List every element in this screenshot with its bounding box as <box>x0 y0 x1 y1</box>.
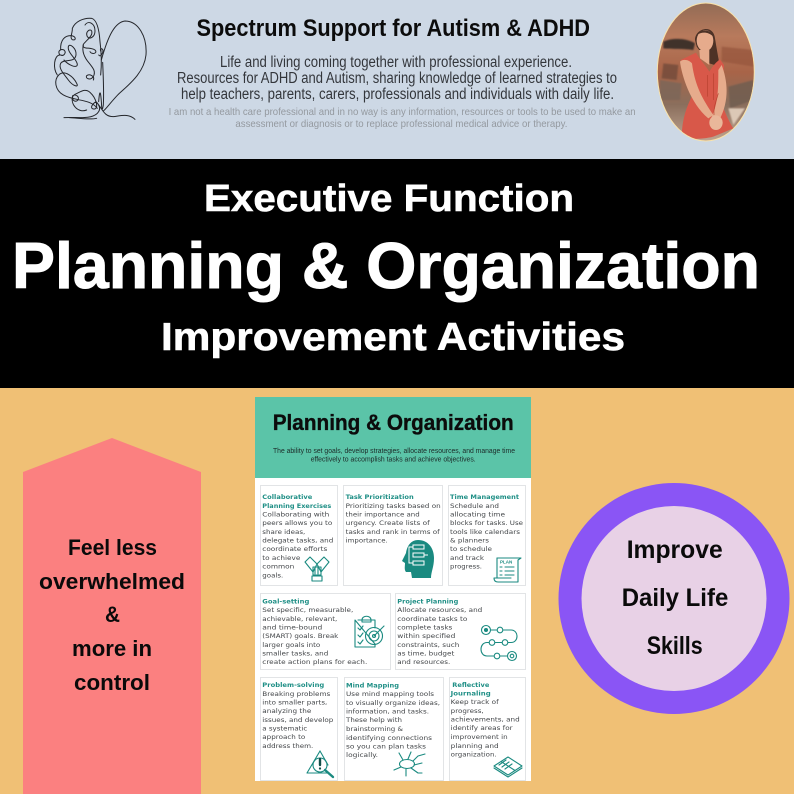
card: problem-solving: Breaking problems <box>262 690 331 698</box>
card: collaborative planning exercises: delegate tasks, and <box>262 536 333 544</box>
icon: plan scroll: PLAN <box>500 560 512 564</box>
card: project planning <box>396 594 526 670</box>
title line: Improvement Activities: Improvement Activities <box>161 316 625 359</box>
card: task prioritization: their importance and <box>346 510 420 518</box>
card: problem-solving: analyzing the <box>262 707 311 715</box>
card: mind mapping: logically. <box>346 751 378 759</box>
card: project planning: Project Planning <box>397 598 459 606</box>
icon: clipboard with target <box>355 616 384 647</box>
icon: joined hands <box>305 557 329 581</box>
main title: Planning & Organization: Planning & Organization <box>12 229 760 302</box>
arrow callout: feel less overwhelmed: more in <box>72 636 152 661</box>
circle callout: improve daily life skills: Skills <box>647 632 703 660</box>
card: goal-setting: smaller tasks, and <box>262 650 328 658</box>
card: project planning: complete tasks <box>397 624 453 632</box>
circle callout: improve daily life skills: Daily Life <box>622 584 728 612</box>
card: task prioritization: tasks and rank in terms of <box>346 528 440 536</box>
card: collaborative planning exercises: Collaborative <box>262 493 313 501</box>
card: goal-setting: larger goals into <box>262 641 320 649</box>
author portrait <box>656 2 755 142</box>
icon: brain and heart line logo <box>55 18 146 119</box>
card: project planning: within specified <box>397 632 455 640</box>
arrow callout: feel less overwhelmed: control <box>74 670 150 695</box>
card: reflective journaling: planning and <box>451 742 499 750</box>
card: mind mapping: so you can plan tasks <box>346 742 427 750</box>
card: time management: & planners <box>450 536 490 544</box>
card: mind mapping: to visually organize ideas, <box>346 699 440 707</box>
disclaimer: I am not a health care professional and in no way is any information, resources or tools to be used to make an <box>169 106 636 118</box>
card: collaborative planning exercises: coordinate efforts <box>262 545 328 553</box>
card: problem-solving: into smaller parts, <box>262 698 327 706</box>
card: reflective journaling: achievements, and <box>451 716 520 724</box>
brand description <box>177 54 617 103</box>
card: collaborative planning exercises: peers allows you to <box>262 519 332 527</box>
circle callout: improve daily life skills <box>558 483 790 714</box>
card: mind mapping: information, and tasks. <box>346 708 429 716</box>
card: goal-setting: and time-bound <box>262 624 322 632</box>
card: project planning: and resources. <box>397 658 450 666</box>
card: project planning: constraints, such <box>397 641 459 649</box>
worksheet header: effectively to accomplish tasks and achieve objectives. <box>311 456 476 464</box>
card: time management <box>448 486 526 586</box>
card: goal-setting: create action plans for each. <box>262 658 367 666</box>
card: reflective journaling: progress, <box>451 707 484 715</box>
brand description: Resources for ADHD and Autism, sharing knowledge of learned strategies to <box>177 70 617 87</box>
card: time management: Schedule and <box>450 502 499 510</box>
lower background <box>0 388 794 794</box>
disclaimer <box>169 106 636 130</box>
card: collaborative planning exercises <box>260 486 338 586</box>
card: project planning: Allocate resources, and <box>397 606 482 614</box>
card: time management: allocating time <box>450 510 505 518</box>
card: goal-setting: Set specific, measurable, <box>262 606 353 614</box>
card: task prioritization: importance. <box>346 536 388 544</box>
card: collaborative planning exercises: goals. <box>262 571 283 579</box>
icon: open journal <box>494 757 522 777</box>
card: reflective journaling: Reflective <box>452 681 490 689</box>
arrow callout: feel less overwhelmed: overwhelmed <box>39 569 185 594</box>
card: problem-solving: a systematic <box>262 724 308 732</box>
card: task prioritization <box>344 486 442 586</box>
card: goal-setting: (SMART) goals. Break <box>262 632 339 640</box>
card: goal-setting: Goal-setting <box>262 598 310 606</box>
card: task prioritization: Task Prioritization <box>346 493 414 501</box>
worksheet header <box>255 397 531 478</box>
worksheet header: Planning & Organization <box>273 410 514 435</box>
card: reflective journaling <box>450 678 526 780</box>
card: task prioritization: Prioritizing tasks based on <box>346 502 441 510</box>
title band <box>0 159 794 388</box>
card: reflective journaling: organization. <box>451 750 497 758</box>
card: reflective journaling: Keep track of <box>451 698 499 706</box>
card: mind mapping <box>344 678 444 780</box>
card: mind mapping: Mind Mapping <box>346 682 399 690</box>
title line: Executive Function: Executive Function <box>204 178 574 220</box>
card: time management: tools like calendars <box>450 528 521 536</box>
icon: mind map <box>394 752 425 776</box>
brand description: Life and living coming together with professional experience. <box>220 54 572 71</box>
card: time management: Time Management <box>450 493 519 501</box>
card: goal-setting <box>260 594 390 670</box>
card: project planning: coordinate tasks to <box>397 615 467 623</box>
card: reflective journaling: identify areas for <box>451 724 513 732</box>
card: collaborative planning exercises: to achieve <box>262 554 300 562</box>
brand title: Spectrum Support for Autism & ADHD <box>196 15 590 42</box>
circle callout: improve daily life skills: Improve <box>627 536 723 564</box>
card: problem-solving: issues, and develop <box>262 716 333 724</box>
card: time management: blocks for tasks. Use <box>450 519 523 527</box>
disclaimer: assessment or diagnosis or to replace professional medical advice or therapy. <box>235 118 567 130</box>
icon: head with task list <box>402 540 434 578</box>
arrow callout: feel less overwhelmed: Feel less <box>68 535 157 560</box>
card: problem-solving <box>260 678 338 780</box>
card: time management: and track <box>450 554 484 562</box>
arrow callout: feel less overwhelmed <box>23 438 201 794</box>
card: mind mapping: Use mind mapping tools <box>346 690 435 698</box>
card: goal-setting: achievable, relevant, <box>262 615 337 623</box>
card: reflective journaling: improvement in <box>451 733 508 741</box>
arrow callout: feel less overwhelmed: & <box>105 602 120 627</box>
card: mind mapping: brainstorming & <box>346 725 403 733</box>
card: collaborative planning exercises: share ideas, <box>262 528 305 536</box>
card: collaborative planning exercises: common <box>262 562 294 570</box>
card: time management: to schedule <box>450 545 492 553</box>
card: problem-solving: approach to <box>262 733 305 741</box>
card: task prioritization: urgency. Create lists of <box>346 519 430 527</box>
brand description: help teachers, parents, carers, professionals and individuals with daily life. <box>181 86 614 103</box>
header panel <box>0 0 794 160</box>
icon: milestone path <box>481 626 517 660</box>
card: problem-solving: Problem-solving <box>262 681 325 689</box>
card: mind mapping: These help with <box>345 716 402 724</box>
card: reflective journaling: Journaling <box>450 690 491 698</box>
card: collaborative planning exercises: Planning Exercises <box>262 502 331 510</box>
worksheet preview panel <box>255 397 531 781</box>
card: collaborative planning exercises: Collaborating with <box>262 510 329 518</box>
card: problem-solving: address them. <box>262 742 313 750</box>
card: project planning: as time, budget <box>397 650 455 658</box>
card: mind mapping: identifying connections <box>346 734 433 742</box>
worksheet header: The ability to set goals, develop strategies, allocate resources, and manage time <box>273 448 515 455</box>
card: time management: progress. <box>450 562 482 570</box>
icon: warning triangle and magnifier <box>307 751 333 777</box>
